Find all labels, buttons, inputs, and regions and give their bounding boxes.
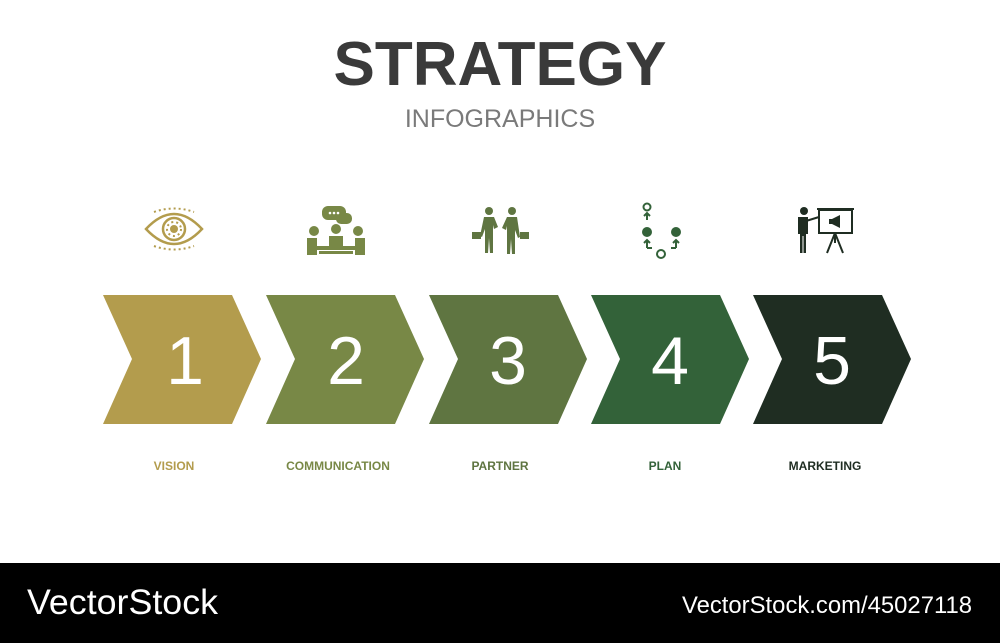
label: marketing: MARKETING xyxy=(789,459,861,473)
arrow 5: 5 xyxy=(813,323,851,399)
arrow 4: 4 xyxy=(651,323,689,399)
icon: partner handshake xyxy=(472,207,529,254)
label: communication: COMMUNICATION xyxy=(286,459,390,473)
icon: plan xyxy=(642,204,681,258)
label: partner: PARTNER xyxy=(471,459,529,473)
arrow 2: 2 xyxy=(327,323,365,399)
icon: eye xyxy=(146,208,202,250)
arrow 3: 3 xyxy=(489,323,527,399)
icon: communication xyxy=(307,206,365,255)
arrow 4 xyxy=(591,295,749,424)
footer bar: VectorStock.com/45027118 xyxy=(682,592,972,619)
arrow 5 xyxy=(753,295,911,424)
label: plan: PLAN xyxy=(649,459,681,473)
arrow 1: 1 xyxy=(166,323,204,399)
footer bar: VectorStock xyxy=(27,583,219,622)
title: STRATEGY xyxy=(334,30,666,99)
arrow 1 xyxy=(103,295,261,424)
arrow 3 xyxy=(429,295,587,424)
arrow 2 xyxy=(266,295,424,424)
subtitle: INFOGRAPHICS xyxy=(405,105,595,133)
icon: marketing presentation xyxy=(798,207,854,253)
label: vision: VISION xyxy=(154,459,194,473)
footer bar xyxy=(0,563,1000,643)
